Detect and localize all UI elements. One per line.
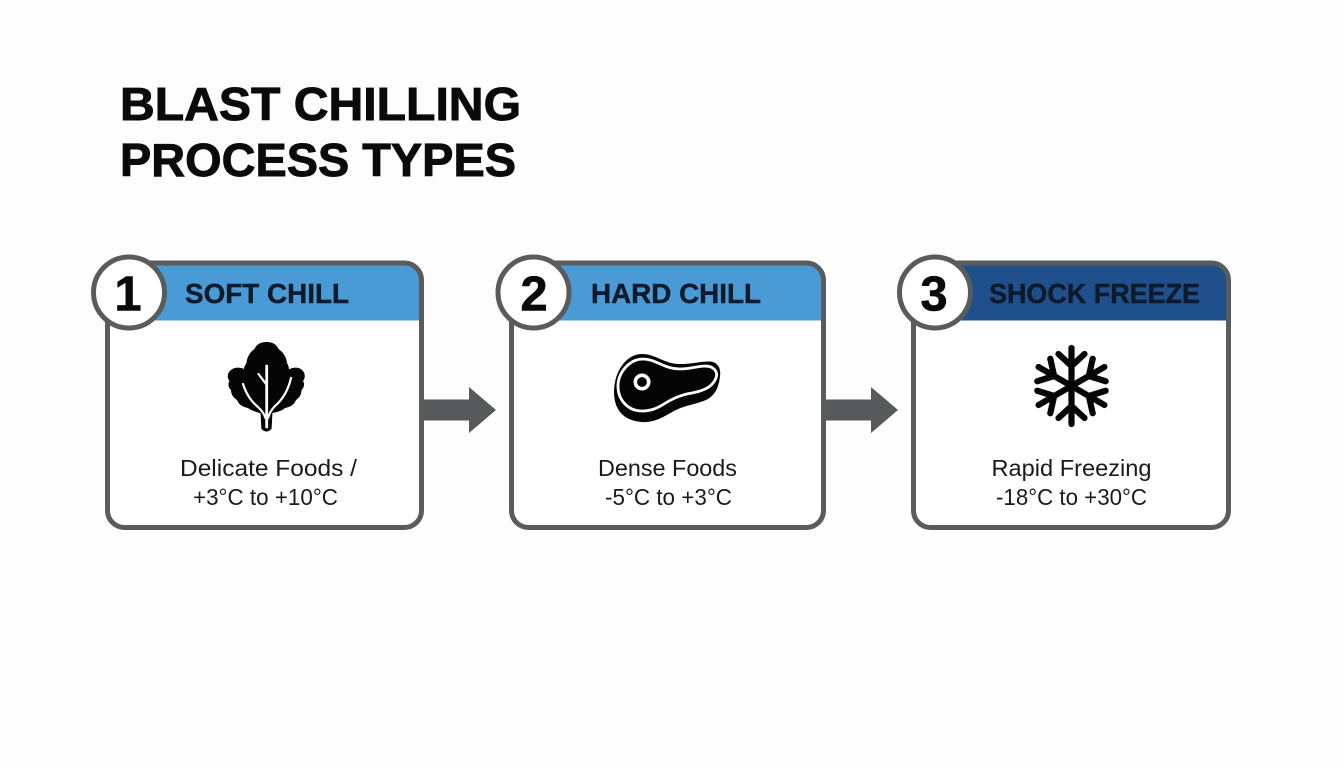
heading: hard chill: HARD CHILL <box>591 278 761 309</box>
panel: hard chill <box>498 257 824 528</box>
icon: steak <box>614 354 720 422</box>
panel: soft chill <box>94 257 422 528</box>
number badge 1: 1 <box>114 268 142 322</box>
arrow: soft chill to hard chill <box>424 387 496 433</box>
number badge 1 <box>94 257 164 328</box>
description: shock freeze: Rapid Freezing <box>992 455 1152 481</box>
arrow: hard chill to shock freeze <box>826 387 898 433</box>
description: hard chill <box>598 455 737 510</box>
header band: hard chill <box>512 263 824 320</box>
description: soft chill: +3°C to +10°C <box>193 484 338 510</box>
icon: leafy greens <box>228 342 305 432</box>
title: BLAST CHILLING <box>120 78 521 130</box>
number badge 2: 2 <box>520 268 548 322</box>
description: soft chill: Delicate Foods / <box>180 455 358 481</box>
description: soft chill <box>180 455 358 510</box>
number badge 3 <box>900 257 970 328</box>
title: PROCESS TYPES <box>120 134 516 186</box>
number badge 2 <box>498 257 569 328</box>
panel: shock freeze <box>900 257 1228 528</box>
description: shock freeze <box>992 455 1152 510</box>
title <box>120 78 521 186</box>
header band: shock freeze <box>914 263 1228 320</box>
number badge 3: 3 <box>920 268 948 322</box>
header band: soft chill <box>108 263 422 320</box>
heading: soft chill: SOFT CHILL <box>185 278 349 309</box>
description: shock freeze: -18°C to +30°C <box>996 484 1147 510</box>
description: hard chill: Dense Foods <box>598 455 737 481</box>
description: hard chill: -5°C to +3°C <box>605 484 732 510</box>
heading: shock freeze: SHOCK FREEZE <box>989 278 1200 309</box>
icon: snowflake <box>1032 348 1111 424</box>
